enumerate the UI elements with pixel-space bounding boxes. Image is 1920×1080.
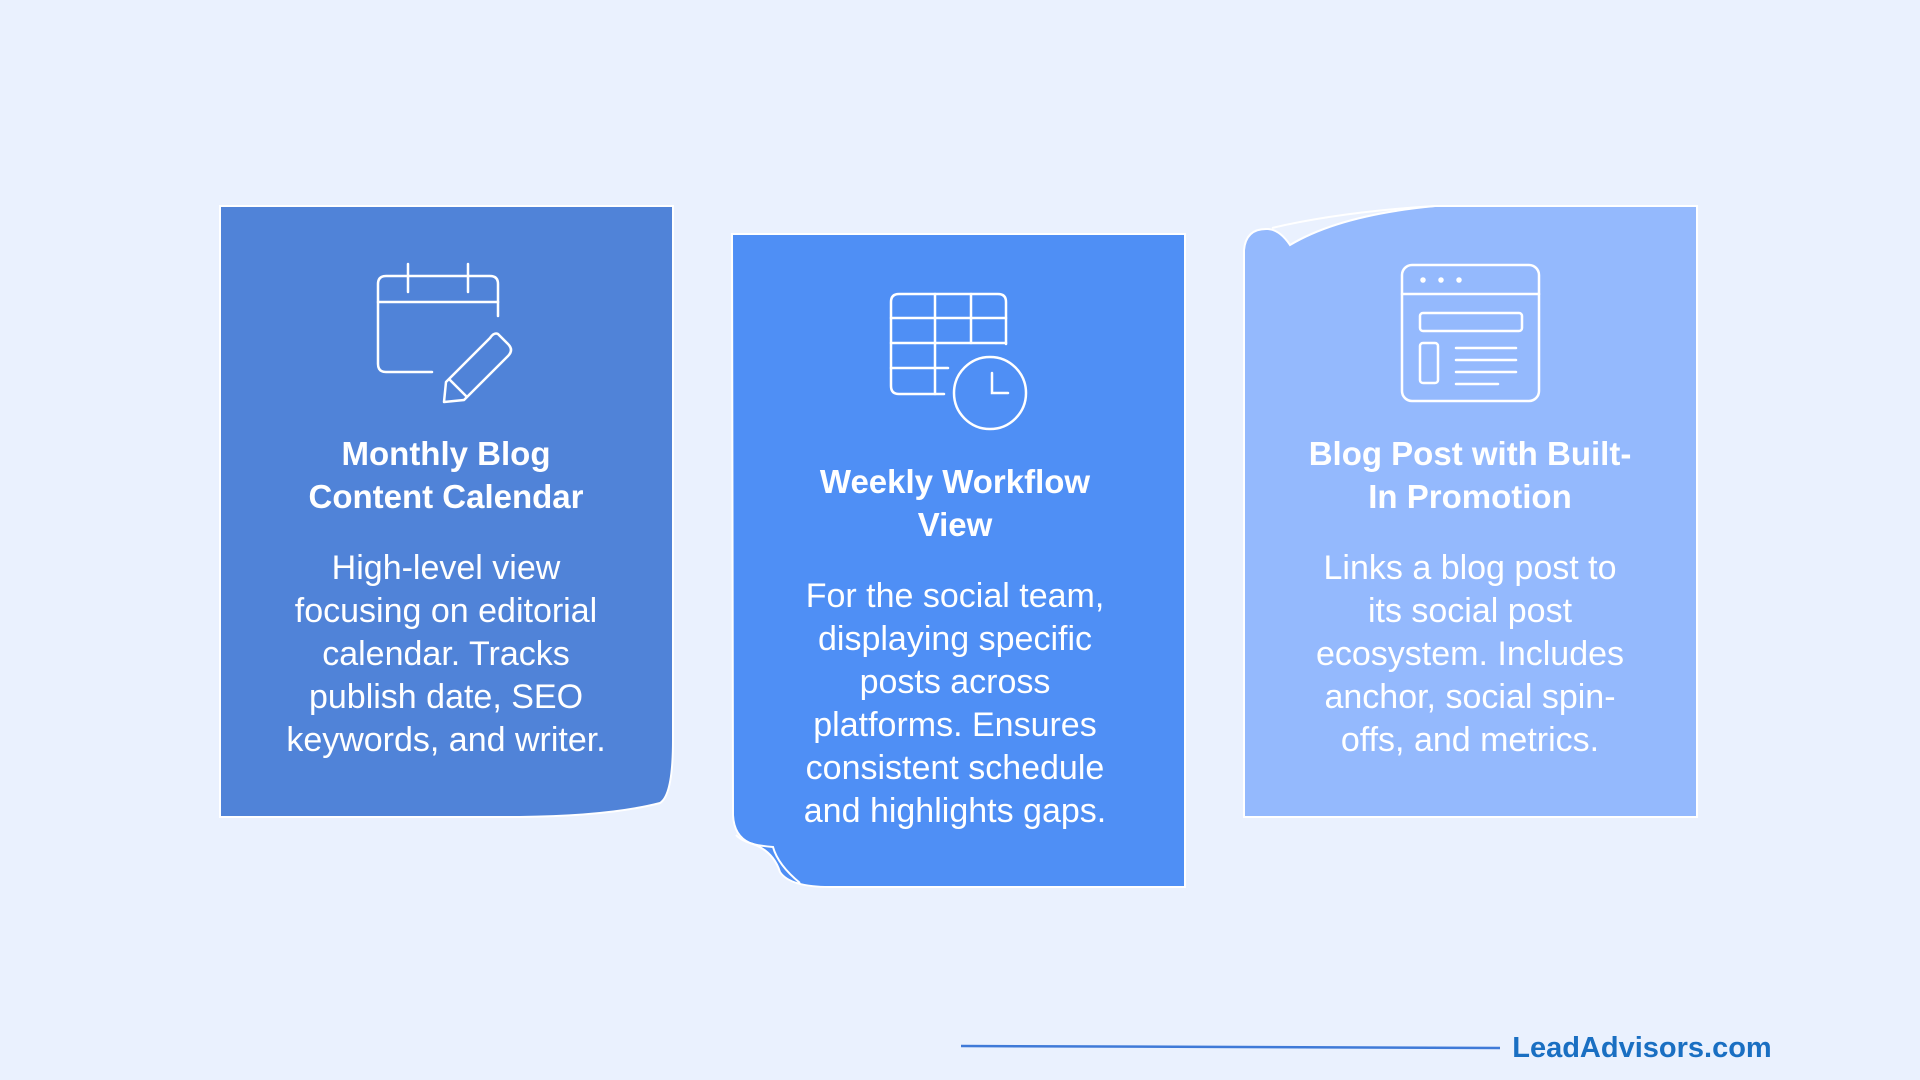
text: weekly body: For the social team, xyxy=(806,577,1104,615)
icon: table with clock xyxy=(891,294,1026,429)
text: monthly body: High-level view xyxy=(332,549,561,587)
panel: monthly blog content calendar: keywords, and writer. xyxy=(286,721,606,759)
panel: monthly blog content calendar: publish date, SEO xyxy=(309,678,583,716)
panel: blog post with built-in promotion xyxy=(1244,206,1697,817)
panel: weekly workflow view: posts across xyxy=(860,663,1050,701)
title: blog post: Blog Post with Built- xyxy=(1309,435,1631,472)
panel: monthly blog content calendar: Content Calendar xyxy=(308,478,584,515)
icon: calendar with pencil xyxy=(378,264,511,402)
text: blog post body: Links a blog post to xyxy=(1324,549,1616,587)
title: weekly: Weekly Workflow xyxy=(820,463,1090,500)
panel: weekly workflow view: displaying specific xyxy=(818,620,1092,658)
icon: web page layout xyxy=(1402,265,1539,401)
panel: monthly blog content calendar: focusing on editorial xyxy=(295,592,597,630)
panel: weekly workflow view xyxy=(732,234,1185,887)
title: monthly: Monthly Blog xyxy=(342,435,550,472)
panel: blog post with built-in promotion: offs, and metrics. xyxy=(1341,721,1599,759)
panel: blog post with built-in promotion: its social post xyxy=(1368,592,1573,630)
panel: blog post with built-in promotion: ecosystem. Includes xyxy=(1316,635,1624,673)
panel: weekly workflow view: platforms. Ensures xyxy=(813,706,1097,744)
footer: brand: LeadAdvisors.com xyxy=(1512,1032,1772,1064)
panel: weekly workflow view: View xyxy=(918,506,993,543)
panel: weekly workflow view: and highlights gaps. xyxy=(804,792,1106,830)
panel: weekly workflow view: consistent schedule xyxy=(806,749,1104,787)
panel: monthly blog content calendar xyxy=(220,206,673,817)
panel: blog post with built-in promotion: In Promotion xyxy=(1368,478,1572,515)
panel: blog post with built-in promotion: anchor, social spin- xyxy=(1324,678,1616,716)
panel: monthly blog content calendar: calendar. Tracks xyxy=(322,635,570,673)
